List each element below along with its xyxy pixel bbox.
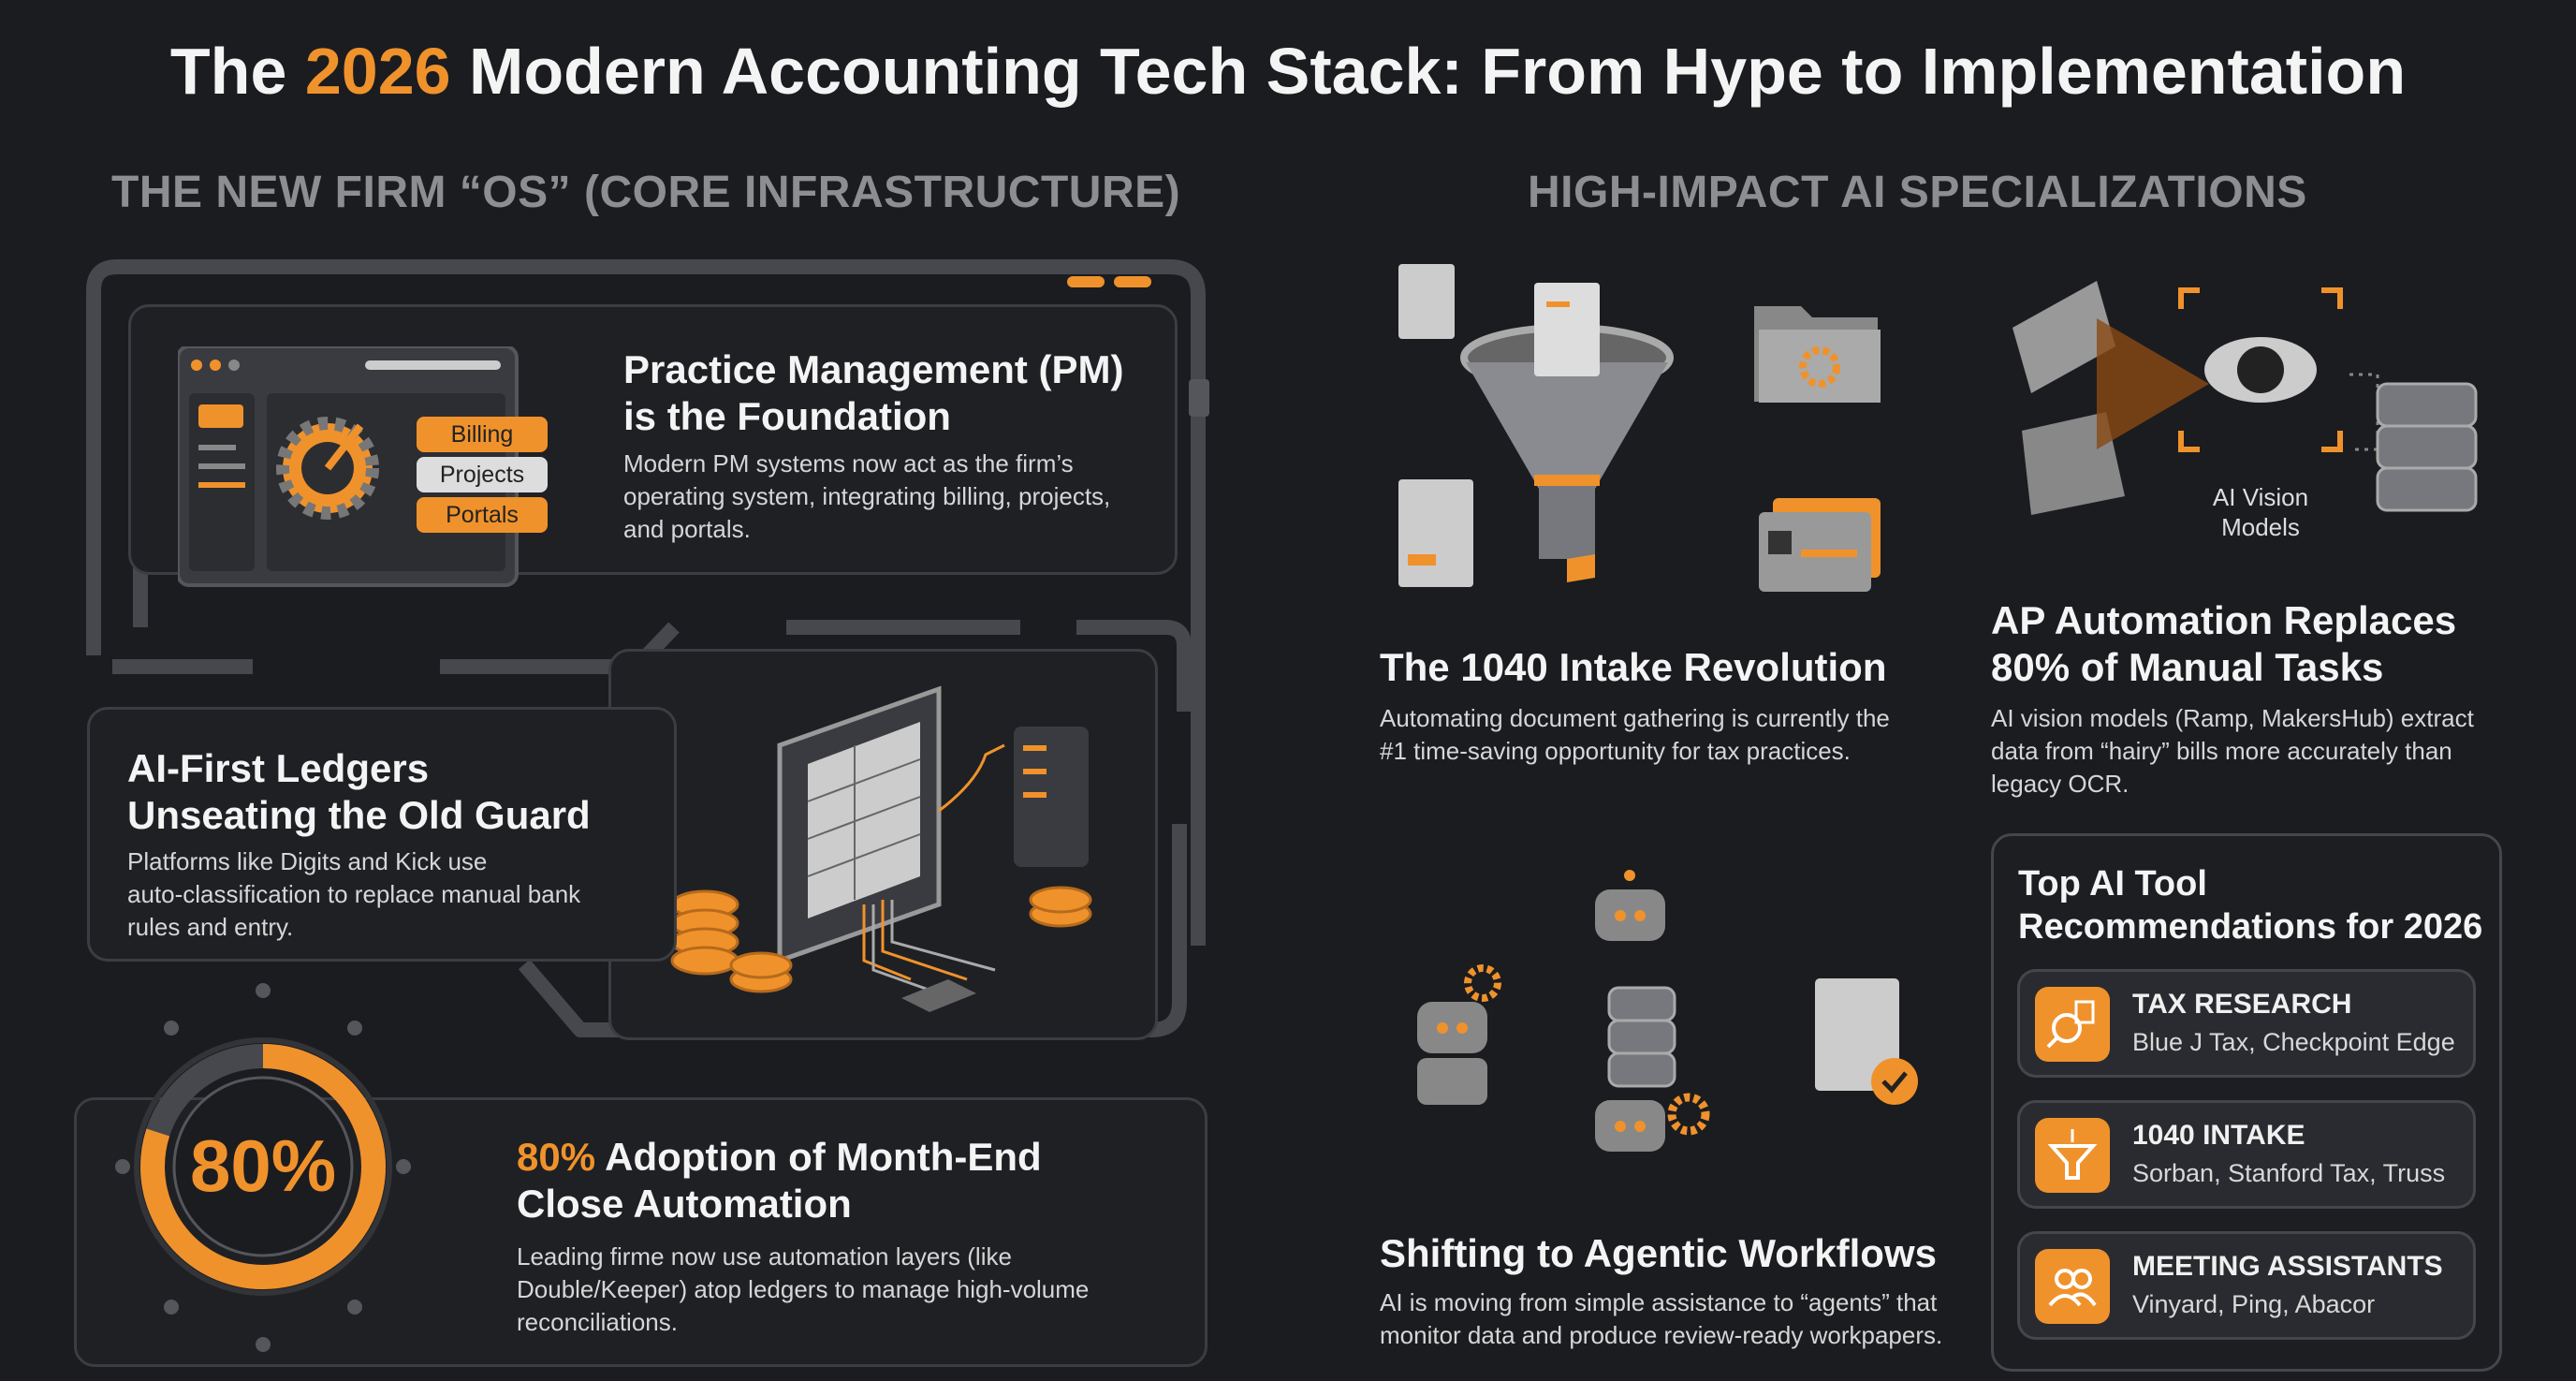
AP body: AI vision models (Ramp, MakersHub) extract data from “hairy” bills more accurately than legacy OCR. [1991,704,2474,798]
panel: month-end close [74,1097,1208,1367]
month-end body: Double/Keeper) atop ledgers to manage high-volume [517,1275,1089,1303]
icon: PM dashboard mockup: Portals [446,502,519,528]
agentic body: AI is moving from simple assistance to “agents” that monitor data and produce review-ready workpapers. [1380,1288,1942,1349]
ledgers body: Platforms like Digits and Kick use [127,847,487,875]
frame lines [86,259,1209,1037]
PM heading [623,347,1123,438]
tools heading: Recommendations for 2026 [2018,907,2482,947]
icon group: intake funnel [1398,264,1881,592]
icon: PM dashboard mockup: Billing [451,421,513,448]
icon: PM dashboard mockup: Projects [440,462,524,488]
panel: top AI tools [1991,833,2502,1372]
ledgers body: rules and entry. [127,913,293,941]
icon group: AI vision: AI Vision [2213,483,2308,511]
heading: AI specializations: HIGH-IMPACT AI SPECIALIZATIONS [1528,168,2307,217]
tools heading [2018,864,2482,947]
PM heading: Practice Management (PM) [623,347,1123,391]
intake heading: The 1040 Intake Revolution [1380,645,1887,689]
month-end body [517,1242,1089,1336]
tools heading: Top AI Tool [2018,864,2207,904]
intake body: #1 time-saving opportunity for tax practices. [1380,737,1851,765]
tool: 1040 intake: 1040 INTAKE [2132,1120,2305,1151]
tool: meeting assistants: MEETING ASSISTANTS [2132,1251,2443,1282]
title: The 2026 Modern Accounting Tech Stack: From Hype to Implementation [170,35,2406,108]
tool: tax research [2017,969,2476,1078]
icon group: AI vision [2012,281,2477,541]
intake body: Automating document gathering is currently the [1380,704,1890,732]
PM heading: is the Foundation [623,394,951,438]
panel: practice management [128,304,1178,575]
month-end heading: Close Automation [517,1182,852,1226]
ledgers heading: Unseating the Old Guard [127,793,591,837]
PM body: Modern PM systems now act as the firm’s operating system, integrating billing, projects, and portals. [623,449,1110,543]
tool: meeting assistants [2017,1231,2476,1340]
chart: 80% ring [115,983,411,1352]
tool: tax research: Blue J Tax, Checkpoint Edge [2132,1028,2455,1056]
AP heading: AP Automation Replaces [1991,598,2456,642]
ledgers body: auto-classification to replace manual bank [127,880,580,908]
ledgers heading: AI-First Ledgers [127,746,429,790]
ledgers heading [127,746,591,837]
month-end body: Leading firme now use automation layers (like [517,1242,1012,1271]
intake body [1380,704,1890,765]
ledgers body [127,847,580,941]
month-end heading: 80% Adoption of Month-End [517,1135,1042,1179]
tool: 1040 intake [2017,1100,2476,1209]
tool: 1040 intake: Sorban, Stanford Tax, Truss [2132,1159,2445,1187]
heading: core infrastructure: THE NEW FIRM “OS” (CORE INFRASTRUCTURE) [111,168,1180,217]
month-end heading [517,1135,1042,1226]
tool: meeting assistants: Vinyard, Ping, Abacor [2132,1290,2375,1318]
month-end body: reconciliations. [517,1308,678,1336]
panel: AI-first ledgers [87,707,677,962]
panel: ledger illustration [608,649,1158,1040]
agentic heading: Shifting to Agentic Workflows [1380,1231,1937,1275]
icon: PM dashboard mockup [178,346,548,587]
icon group: agentic workflow [1417,870,1918,1152]
tool: tax research: TAX RESEARCH [2132,989,2351,1020]
chart: 80% ring: 80% [190,1124,336,1207]
icon: ledger screen with coins [670,685,1091,1012]
icon group: AI vision: Models [2221,513,2300,541]
AP heading [1991,598,2456,689]
AP heading: 80% of Manual Tasks [1991,645,2383,689]
